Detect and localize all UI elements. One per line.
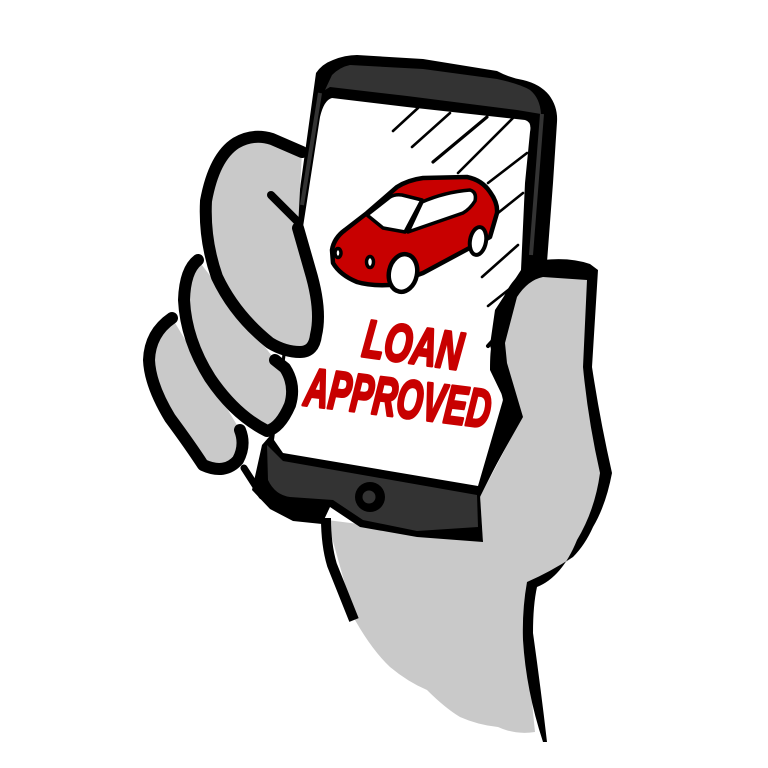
rear wheel <box>468 226 488 256</box>
headline: loan: LOAN <box>359 309 468 382</box>
finger crease <box>271 195 298 222</box>
phone bottom bezel <box>267 445 478 531</box>
lower finger line <box>244 468 262 496</box>
fingers <box>149 137 318 496</box>
headline: approved: APPROVED <box>300 357 494 440</box>
speed lines <box>393 108 527 346</box>
phone top bezel <box>325 65 541 114</box>
palm and wrist <box>326 262 606 733</box>
finger one <box>206 137 318 352</box>
home button <box>355 482 385 512</box>
phone <box>252 55 557 542</box>
side window <box>408 190 475 232</box>
windshield <box>367 195 422 232</box>
finger three <box>149 318 243 469</box>
car body <box>332 177 497 285</box>
phone side edges <box>302 93 542 255</box>
headlights <box>335 248 374 268</box>
finger two <box>184 260 292 431</box>
phone screen <box>274 98 530 486</box>
front wheel <box>385 252 421 294</box>
phone outer body <box>252 55 557 542</box>
car <box>332 177 497 294</box>
thumb outline <box>478 259 612 742</box>
